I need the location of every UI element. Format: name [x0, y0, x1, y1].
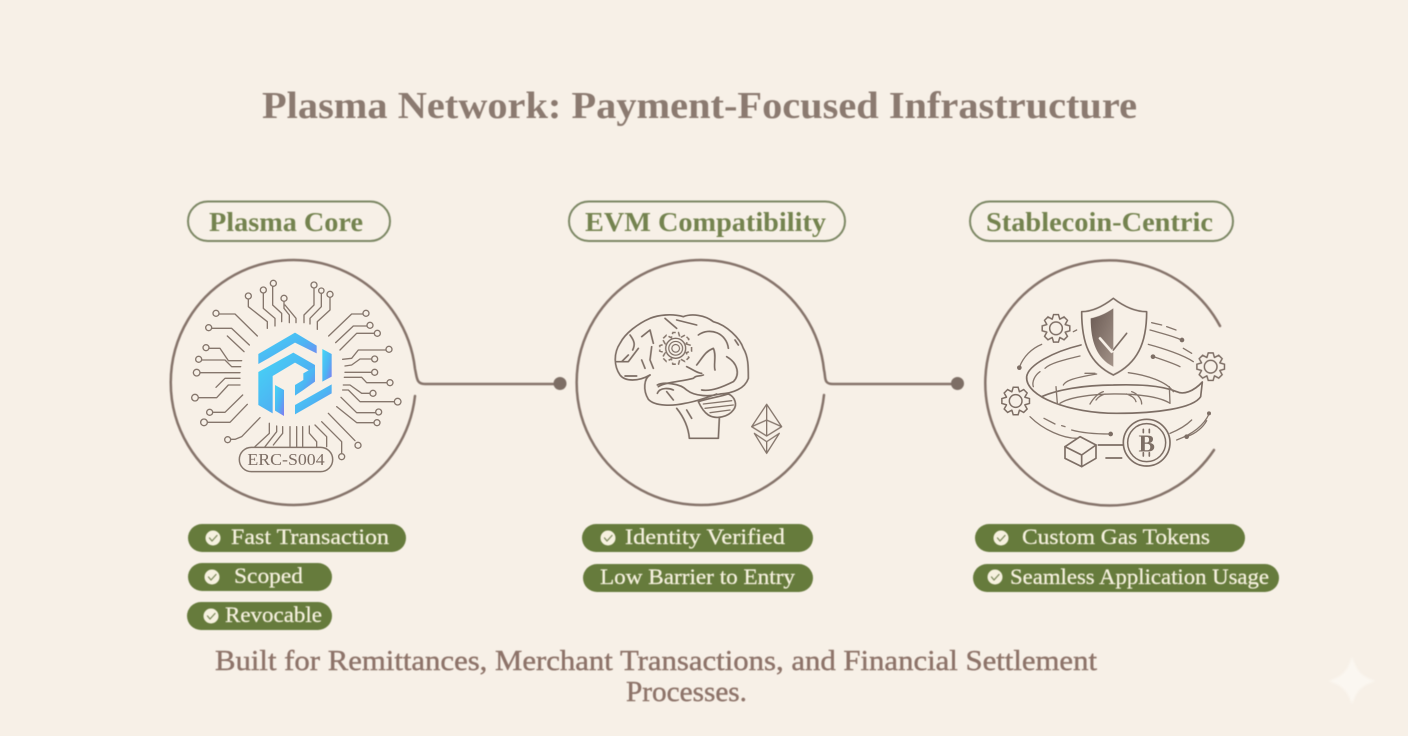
circle frame — [985, 260, 1220, 505]
icon: ethereum diamond — [752, 404, 782, 453]
panel: Plasma Core — [171, 202, 566, 630]
heading: EVM Compatibility: EVM Compatibility — [585, 207, 827, 237]
pill: Identity Verified: Identity Verified — [625, 524, 785, 549]
motion lines — [1017, 323, 1211, 440]
shield with check — [1082, 298, 1147, 375]
pill: Fast Transaction: Fast Transaction — [231, 524, 389, 549]
title: Plasma Network: Payment-Focused Infrastructure — [262, 85, 1137, 127]
pill: Revocable — [187, 602, 332, 630]
icon: shield, ring, gears, coin — [1002, 298, 1224, 467]
gears — [1002, 315, 1224, 415]
heading: Plasma Core — [188, 202, 390, 241]
bitcoin coin: B — [1138, 430, 1155, 457]
logo: blue hexagon — [258, 333, 332, 416]
pill: Custom Gas Tokens: Custom Gas Tokens — [1022, 524, 1210, 549]
checklist: Stablecoin-Centric — [973, 524, 1279, 592]
pill: Custom Gas Tokens — [975, 524, 1245, 552]
badge: ERC-S004: ERC-S004 — [247, 450, 325, 469]
footer text — [215, 646, 1097, 708]
ring band — [1027, 345, 1202, 413]
heading: Plasma Core: Plasma Core — [209, 207, 363, 237]
pill: Identity Verified — [582, 524, 813, 552]
checklist: Plasma Core — [187, 524, 406, 630]
checklist: EVM Compatibility — [582, 524, 813, 592]
heading: Stablecoin-Centric: Stablecoin-Centric — [986, 207, 1213, 237]
icon: sparkle watermark — [1328, 656, 1376, 705]
pill: Fast Transaction — [188, 524, 406, 552]
circle frame with connector — [171, 260, 566, 505]
pill: Scoped: Scoped — [234, 563, 303, 588]
icon: circuit chip — [192, 280, 401, 472]
badge: ERC-S004 — [239, 447, 333, 472]
circle frame with connector — [577, 260, 964, 505]
bitcoin coin — [1098, 419, 1170, 466]
panel: EVM Compatibility — [569, 202, 964, 592]
pill: Seamless Application Usage: Seamless Application Usage — [1010, 564, 1269, 589]
heading: Stablecoin-Centric — [970, 202, 1233, 241]
footer text: Built for Remittances, Merchant Transactions, and Financial Settlement — [215, 646, 1097, 677]
icon: brain with gear — [615, 315, 782, 453]
pill: Low Barrier to Entry: Low Barrier to Entry — [600, 564, 795, 589]
gear in brain — [660, 332, 692, 364]
panel: Stablecoin-Centric — [970, 202, 1279, 592]
pill: Revocable: Revocable — [225, 602, 322, 627]
heading: EVM Compatibility — [569, 202, 845, 241]
footer text: Processes. — [626, 677, 747, 708]
cube — [1065, 437, 1096, 467]
pill: Scoped — [188, 563, 332, 591]
